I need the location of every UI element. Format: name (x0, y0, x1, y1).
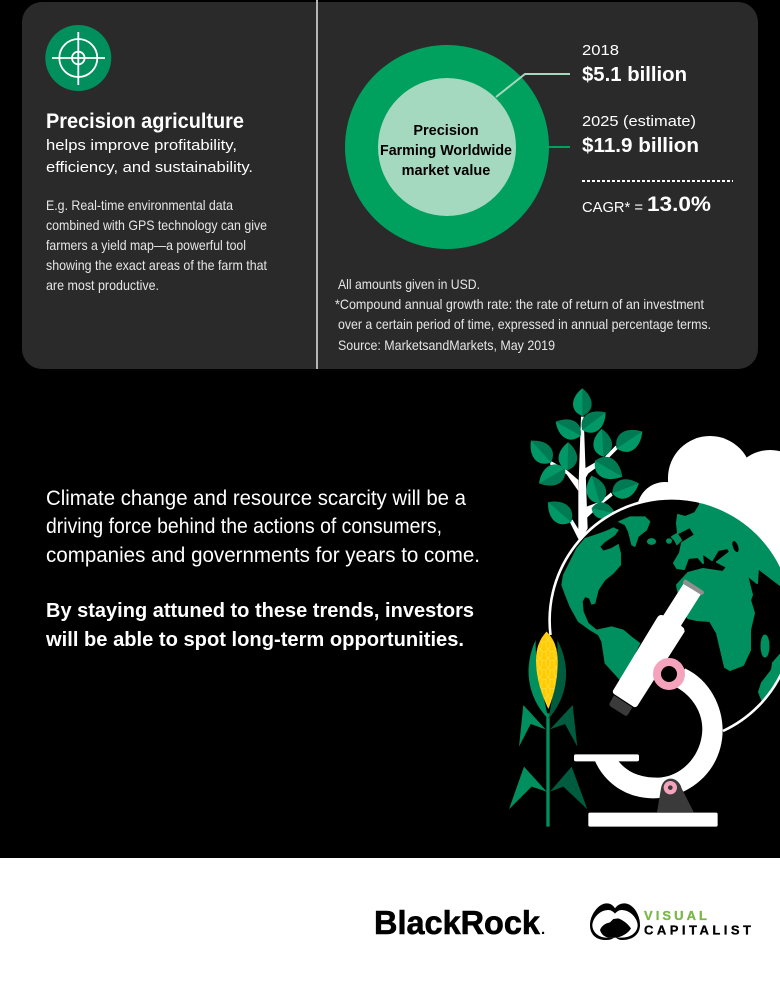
stat: 2025 estimate (582, 113, 699, 157)
continent: Eurasia and Africa (673, 502, 780, 671)
corn stalk (546, 713, 550, 827)
subheading (46, 137, 253, 176)
continent: the Americas (562, 528, 640, 682)
logo: BlackRock: BlackRock (374, 904, 541, 941)
stat: 2018 value (582, 42, 687, 86)
globe disc (550, 498, 780, 742)
stat: 2018 value: 2018 (582, 42, 619, 59)
heading: Precision agriculture (46, 110, 244, 133)
text block: example: farmers a yield map—a powerful tool (46, 237, 246, 253)
microscope base (588, 813, 718, 827)
globe continents (561, 502, 780, 701)
subheading: helps improve profitability, (46, 137, 237, 154)
continent: Australia (759, 650, 780, 702)
microscope pivot (657, 779, 694, 813)
lake (732, 541, 739, 552)
footnotes (335, 276, 711, 353)
logo: Visual Capitalist: CAPITALIST (644, 922, 751, 938)
illustration: globe (548, 500, 780, 732)
stat: CAGR: 13.0% (647, 193, 711, 216)
footnotes: over a certain period of time, expressed in annual percentage terms. (338, 316, 711, 332)
panel: precision agriculture (22, 0, 758, 369)
globe outline (550, 498, 780, 731)
donut centre label: Farming Worldwide (380, 143, 512, 159)
text block: conclusion: companies and governments for years to come. (46, 544, 480, 567)
stat: CAGR (582, 193, 711, 216)
text block: example (46, 197, 267, 293)
panel divider (316, 0, 318, 369)
donut centre label (380, 123, 512, 179)
footer band (0, 858, 780, 988)
corn husk (529, 640, 566, 719)
text block: investor takeaway: By staying attuned to these trends, investors (46, 599, 474, 622)
text block: example: showing the exact areas of the farm that (46, 257, 267, 273)
icon: crosshair target (45, 25, 111, 91)
island: Madagascar (762, 636, 768, 656)
panel background (22, 2, 758, 369)
stat: CAGR: CAGR* = (582, 200, 643, 216)
microscope focus ring (657, 662, 681, 686)
illustration: microscope (574, 579, 723, 827)
donut centre label: Precision (413, 123, 479, 139)
illustration: plant (524, 388, 648, 542)
footnotes: All amounts given in USD. (338, 276, 480, 292)
microscope nose (609, 695, 632, 716)
stat: 2018 value: $5.1 billion (582, 64, 687, 86)
corn leaves (509, 705, 587, 809)
text block: investor takeaway: will be able to spot long-term opportunities. (45, 628, 464, 651)
text block: conclusion: driving force behind the actions of consumers, (46, 515, 442, 538)
text block: conclusion (46, 487, 480, 567)
islands (648, 534, 681, 544)
footnotes: Source: MarketsandMarkets, May 2019 (338, 337, 555, 353)
text block: conclusion: Climate change and resource scarcity will be a (46, 487, 466, 510)
donut centre label: market value (402, 163, 490, 179)
text block: example: are most productive. (46, 277, 159, 293)
logo mark: binoculars (590, 903, 640, 940)
logo wordmark: VISUAL (644, 908, 707, 923)
footnotes: *Compound annual growth rate: the rate of return of an investment (335, 296, 704, 312)
microscope arm (595, 668, 723, 798)
illustration: cloud (637, 436, 780, 588)
donut chart: market value (345, 45, 570, 249)
text block: example: combined with GPS technology can give (46, 217, 267, 233)
microscope tube (613, 584, 701, 707)
plant leaves (524, 388, 648, 530)
subheading: efficiency, and sustainability. (46, 159, 253, 176)
microscope tube cap (683, 579, 704, 595)
plant stem and branches (550, 417, 618, 542)
stat: 2025 estimate: $11.9 billion (582, 135, 699, 157)
text block: investor takeaway (45, 599, 474, 651)
microscope stage (574, 754, 639, 761)
logo: Visual Capitalist (590, 903, 751, 940)
corn cob (536, 632, 558, 709)
logo: BlackRock: . (541, 921, 545, 938)
text block: example: E.g. Real-time environmental data (46, 197, 233, 213)
continent: Greenland (618, 517, 650, 547)
illustration: corn (509, 630, 587, 827)
stat: 2025 estimate: 2025 (estimate) (582, 113, 696, 130)
